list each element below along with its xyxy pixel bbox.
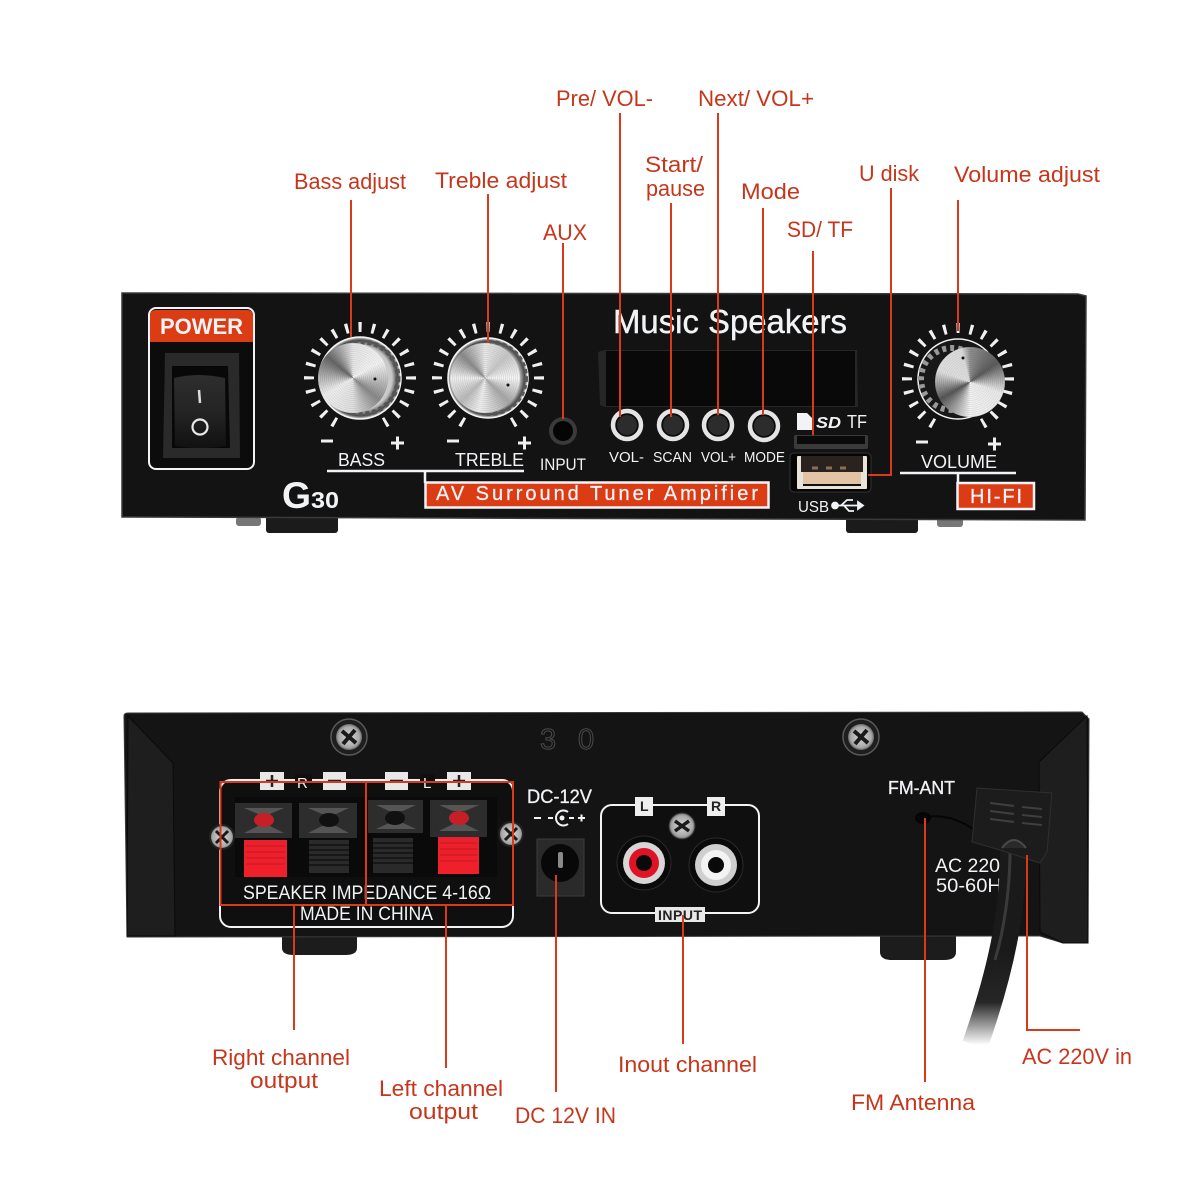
- HI-FI badge: HI-FI: [970, 486, 1022, 508]
- HI-FI badge: [958, 483, 1034, 509]
- INPUT marker: INPUT: [658, 907, 702, 923]
- polarity markers: R: [297, 775, 308, 792]
- callout: FM Antenna: FM Antenna: [851, 1090, 976, 1115]
- callout: Right channel output: output: [250, 1068, 318, 1093]
- G30 logo: 30: [311, 487, 339, 513]
- callout: Start/ pause: Start/: [645, 152, 704, 177]
- DC power input: [527, 787, 592, 896]
- embossed number: 3: [540, 724, 556, 756]
- rear chassis: [124, 712, 1089, 943]
- callout: Inout channel: Inout channel: [618, 1052, 757, 1077]
- knob labels: BASS: [338, 450, 385, 470]
- top screws: [331, 719, 879, 755]
- USB port: USB: [798, 499, 829, 516]
- front chassis: [122, 293, 1086, 520]
- button labels: [609, 449, 785, 466]
- callout: Left channel output: Left channel: [379, 1076, 503, 1101]
- polarity markers: [260, 772, 471, 792]
- power cord: [975, 846, 1013, 1045]
- button labels: MODE: [744, 449, 785, 466]
- button labels: VOL-: [609, 449, 644, 466]
- DC power input: DC-12V: [527, 787, 592, 808]
- USB port: [790, 453, 871, 516]
- minus and plus marks: [321, 436, 1001, 450]
- callout: SD/ TF: SD/ TF: [787, 217, 853, 242]
- center screw: [669, 813, 695, 839]
- callout: Next/ VOL+: Next/ VOL+: [698, 86, 814, 111]
- button labels: SCAN: [653, 449, 692, 466]
- white RCA jack: [689, 838, 743, 892]
- AC rating text: [935, 856, 1013, 897]
- label underlines: [327, 471, 1016, 483]
- knob labels: [338, 450, 997, 472]
- callout: Left channel output: [379, 905, 503, 1124]
- callout: AUX: AUX: [543, 220, 587, 245]
- callout: U disk: U disk: [859, 161, 920, 186]
- rocker switch: [163, 353, 240, 458]
- callout: Mode: Mode: [741, 179, 800, 204]
- callout: DC 12V IN: DC 12V IN: [515, 1103, 616, 1128]
- callout: Treble adjust: Treble adjust: [435, 168, 567, 193]
- red RCA jack: [617, 836, 671, 890]
- made in china text: MADE IN CHINA: [300, 904, 433, 925]
- L and R markers: L: [640, 798, 649, 814]
- polarity markers: L: [423, 775, 431, 792]
- callout: AC 220V in: [1022, 855, 1132, 1069]
- G30 logo: [282, 475, 339, 516]
- callout: Start/ pause: pause: [646, 176, 705, 201]
- SD and TF markings: TF: [847, 412, 867, 432]
- callout: speaker output bracket: [220, 782, 513, 905]
- callout: Right channel output: Right channel: [212, 1045, 350, 1070]
- display window: [598, 350, 858, 407]
- FM antenna port: FM-ANT: [888, 778, 955, 798]
- side bevels: [127, 716, 1088, 943]
- knob labels: VOLUME: [921, 452, 997, 472]
- control buttons: [613, 411, 778, 440]
- callout: Pre/ VOL-: Pre/ VOL-: [556, 86, 653, 111]
- POWER label: POWER: [160, 314, 243, 339]
- panel side screws: [210, 822, 523, 849]
- aux input jack: [540, 417, 586, 474]
- embossed number: 0: [578, 724, 594, 756]
- callout: Start/ pause: [645, 152, 705, 417]
- power switch panel: [149, 308, 254, 469]
- icon: USB symbol: [832, 500, 863, 511]
- SD and TF markings: [797, 412, 867, 432]
- speaker terminals: [235, 797, 497, 877]
- impedance text: SPEAKER IMPEDANCE 4-16Ω: [243, 883, 491, 904]
- RCA input panel: [601, 797, 759, 923]
- knob: treble: [437, 327, 539, 423]
- knob: volume: [907, 328, 1009, 424]
- SD and TF markings: SD: [816, 415, 841, 432]
- embossed number: [540, 724, 594, 756]
- aux input jack: INPUT: [540, 455, 586, 474]
- AC rating text: 50-60Hz: [936, 876, 1012, 897]
- callout: AC 220V in: AC 220V in: [1022, 1044, 1132, 1069]
- L and R markers: [635, 797, 725, 816]
- FM antenna port: [888, 778, 992, 848]
- TF card slot: [794, 435, 868, 449]
- title: Music Speakers: Music Speakers: [613, 303, 847, 340]
- callout: U disk: [859, 161, 920, 475]
- panel: amplifier rear view: [124, 712, 1089, 1045]
- G30 logo: G: [282, 475, 311, 516]
- L and R markers: R: [711, 798, 721, 814]
- speaker output panel: [210, 772, 523, 927]
- power plug: [972, 788, 1052, 863]
- callout: Volume adjust: Volume adjust: [954, 162, 1100, 187]
- panel: amplifier front view: [122, 293, 1086, 533]
- knob labels: TREBLE: [455, 450, 524, 470]
- rubber feet and bottom screws: [236, 516, 963, 533]
- callout: Right channel output: [212, 905, 350, 1093]
- knob: bass: [309, 327, 411, 423]
- button labels: VOL+: [701, 449, 736, 466]
- rubber feet: [282, 935, 956, 960]
- AC rating text: AC 220V: [935, 856, 1013, 877]
- callout: Left channel output: output: [409, 1099, 478, 1124]
- AV Surround Tuner Ampifier badge: AV Surround Tuner Ampifier: [436, 483, 758, 505]
- callout: Bass adjust: Bass adjust: [294, 169, 406, 194]
